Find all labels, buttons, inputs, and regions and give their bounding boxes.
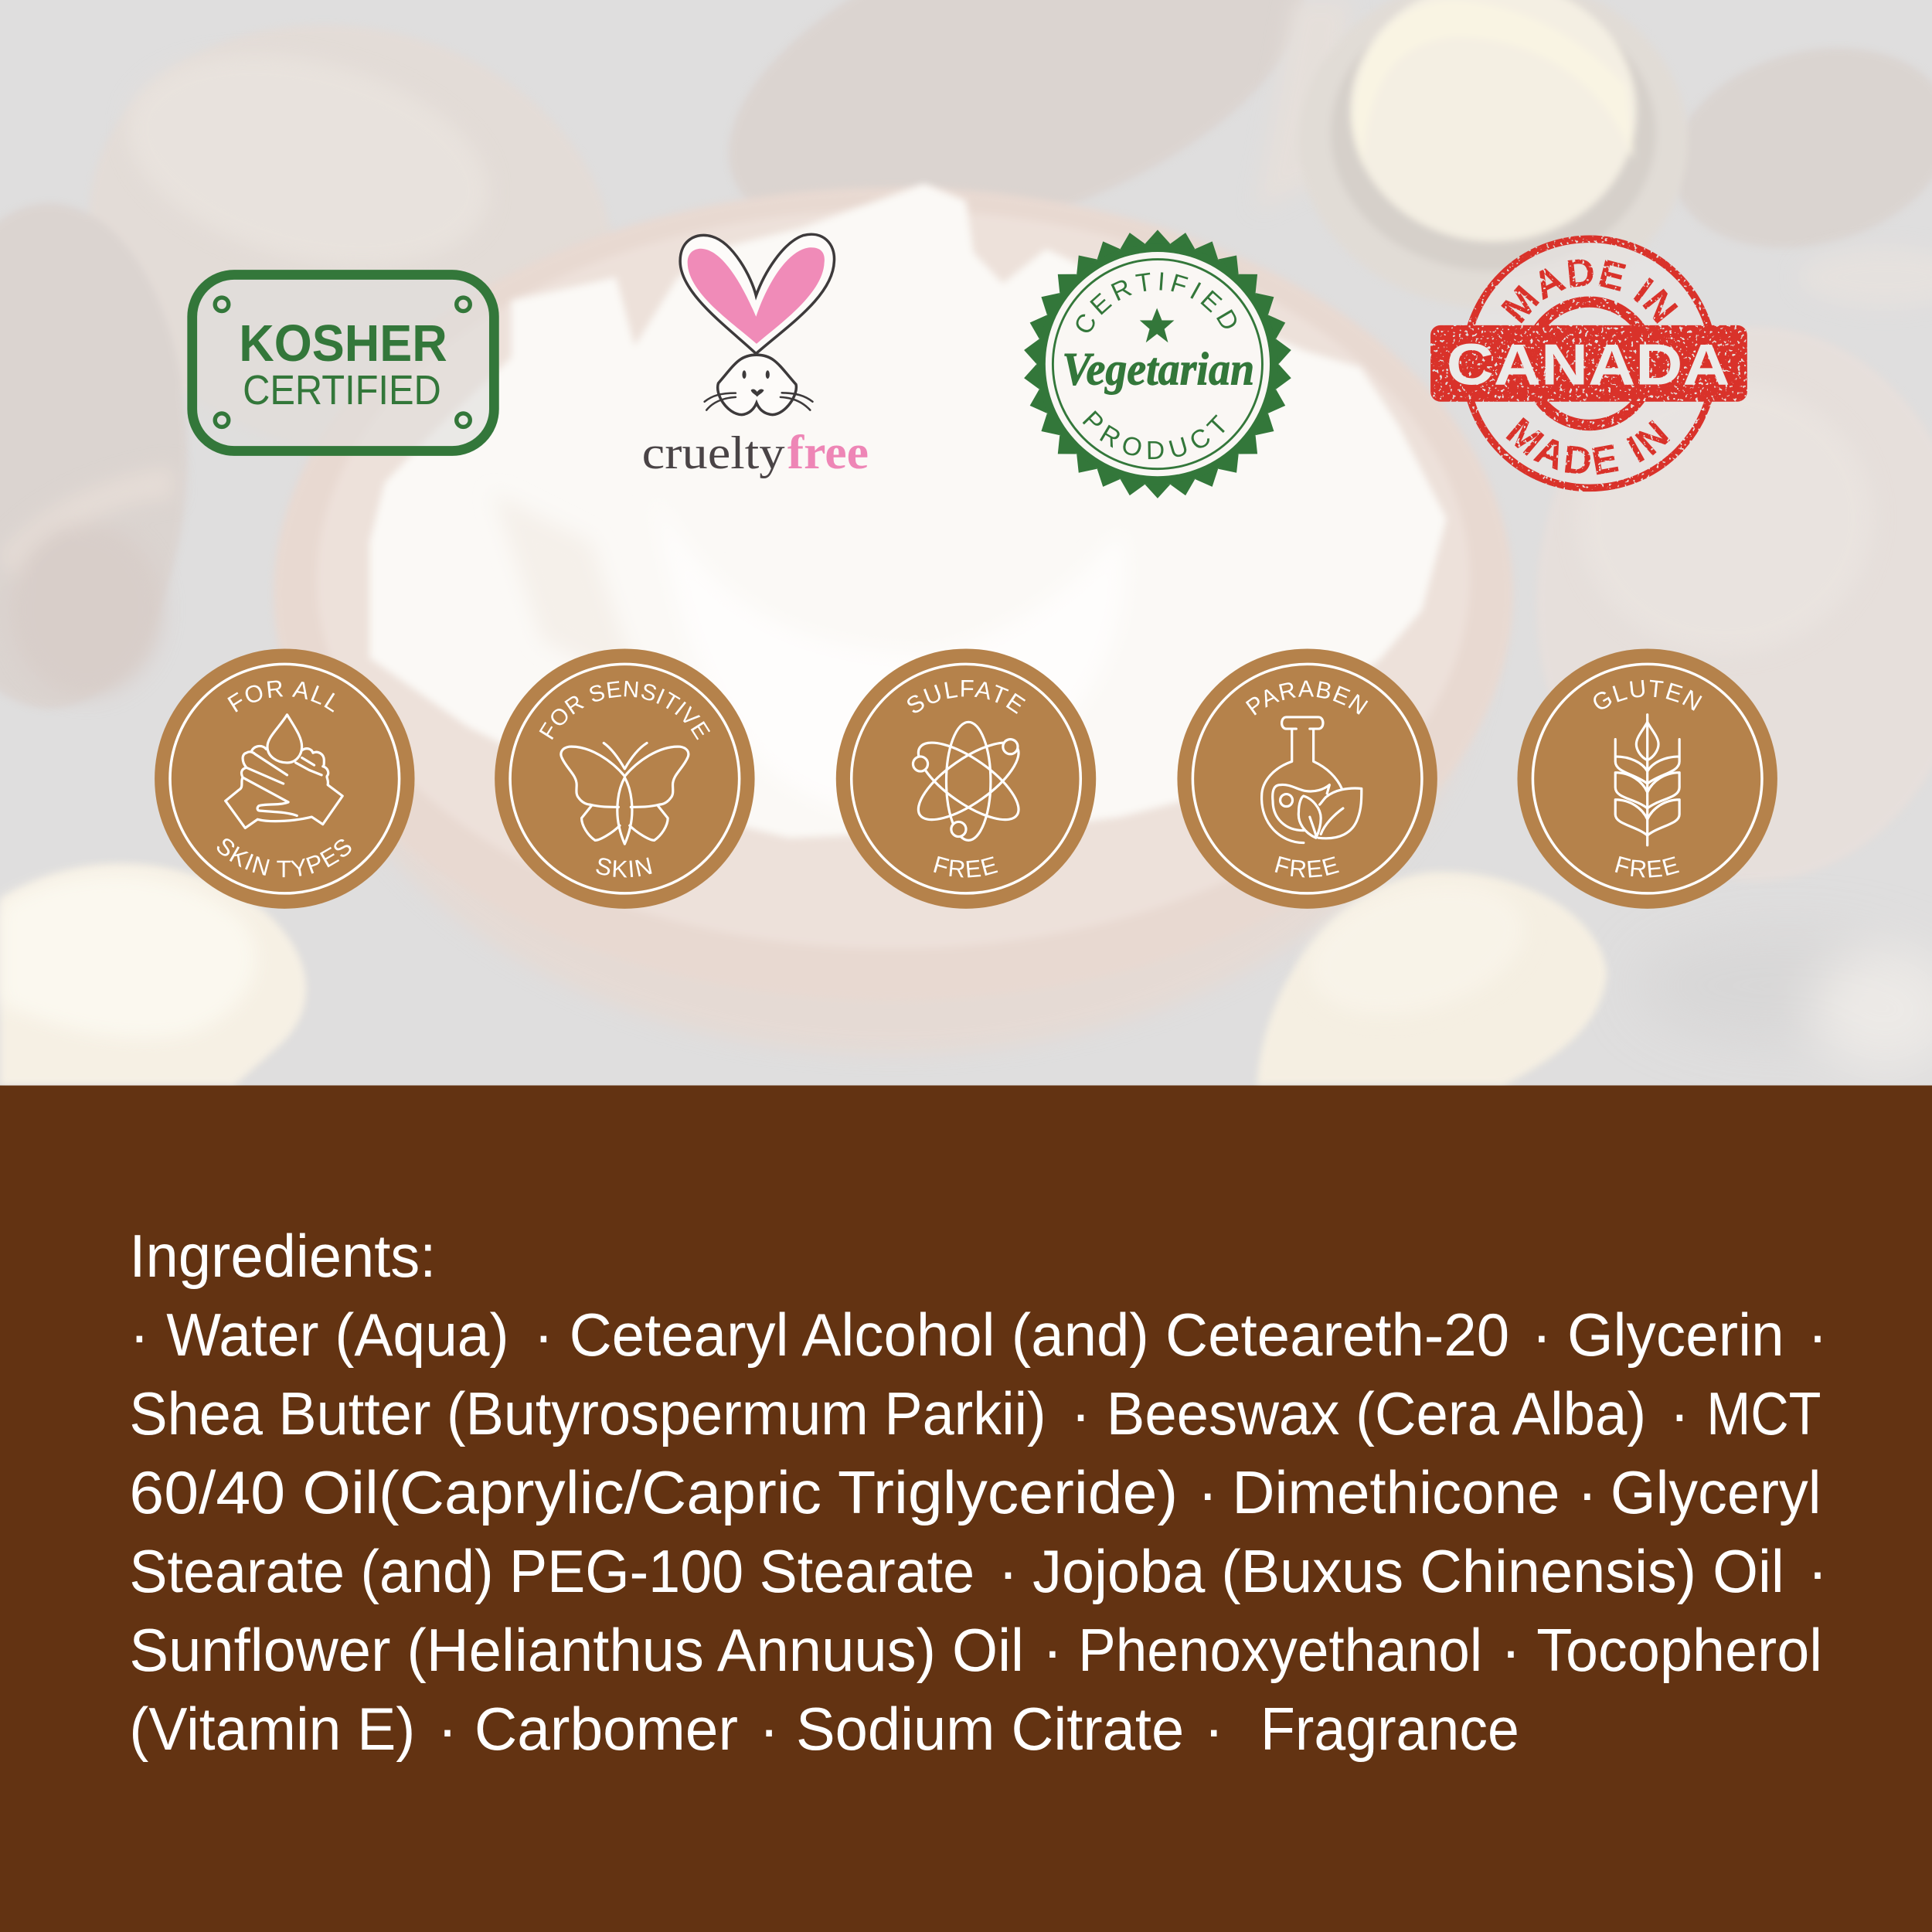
ingredients text: ·	[1808, 1301, 1828, 1369]
bunny ears	[680, 234, 835, 354]
ingredients text: Glyceryl	[1611, 1458, 1821, 1526]
badge: made in canada	[1430, 235, 1747, 492]
ingredients text: ·	[1071, 1379, 1091, 1447]
vegetarian arc text	[1076, 272, 1236, 459]
icon: wheat	[1615, 715, 1679, 845]
ingredients text: Phenoxyethanol	[1078, 1616, 1482, 1684]
ingredients text: Shea Butter (Butyrospermum Parkii)	[129, 1379, 1046, 1447]
badge: paraben free	[1177, 648, 1437, 909]
icon: butterfly	[561, 743, 689, 844]
ingredients text: MCT	[1706, 1379, 1821, 1447]
ingredients text: ·	[1204, 1695, 1224, 1763]
label: gluten free	[1587, 675, 1707, 883]
ingredients text: ·	[437, 1695, 457, 1763]
ingredients text: ·	[1808, 1537, 1828, 1605]
ingredients text: ·	[1501, 1616, 1521, 1684]
badge: kosher certified: KOSHER	[239, 315, 447, 372]
bowl	[396, 845, 1327, 1046]
ingredients text: ·	[759, 1695, 779, 1763]
label: gluten free: GLUTEN	[1594, 680, 1702, 711]
label: for all skin types: SKIN TYPES	[216, 838, 351, 878]
ingredients text: Tocopherol	[1536, 1616, 1822, 1684]
vegetarian arc text: PRODUCT	[1082, 410, 1225, 459]
badge: cruelty free bunny	[642, 234, 869, 479]
ingredients text: Carbomer	[474, 1695, 738, 1763]
ingredients text: ·	[533, 1301, 553, 1369]
badge: cruelty free bunny: free	[787, 427, 869, 479]
ingredients text	[129, 1222, 1828, 1763]
ingredients text: Cetearyl Alcohol (and) Ceteareth-20	[570, 1301, 1509, 1369]
vegetarian star	[1140, 308, 1174, 342]
ingredients text: Dimethicone	[1232, 1458, 1560, 1526]
cup of butter	[1328, 0, 1663, 278]
label: gluten free: FREE	[1615, 856, 1679, 878]
badge: for sensitive skin	[495, 648, 755, 909]
badge: for all skin types	[155, 649, 414, 909]
ingredients text: Glycerin	[1567, 1301, 1784, 1369]
ingredients text: Water (Aqua)	[166, 1301, 509, 1369]
label: for sensitive skin: FOR SENSITIVE	[539, 681, 710, 740]
label: sulfate free: SULFATE	[907, 680, 1026, 714]
icon: hands with drop	[226, 715, 342, 828]
ingredients text: Fragrance	[1260, 1695, 1519, 1763]
badge: sulfate free	[836, 648, 1096, 909]
icon: flask with leaves	[1262, 717, 1362, 843]
badge: made in canada: CANADA	[1447, 332, 1730, 396]
ingredients text: Ingredients:	[129, 1222, 436, 1290]
badge: kosher certified	[192, 275, 494, 451]
ingredients text: ·	[1532, 1301, 1552, 1369]
badge: certified vegetarian product: Vegetarian	[1062, 343, 1254, 395]
label: for all skin types	[216, 680, 351, 878]
badge: kosher certified: CERTIFIED	[243, 367, 441, 413]
cruelty free wordmark: cruelty	[642, 427, 785, 479]
ingredients text: Sodium Citrate	[796, 1695, 1184, 1763]
canada arc text	[1501, 260, 1679, 474]
canada arc text: MADE IN	[1505, 417, 1671, 474]
ingredients text: Sunflower (Helianthus Annuus) Oil	[129, 1616, 1024, 1684]
ingredients text: ·	[1577, 1458, 1597, 1526]
label: paraben free: FREE	[1275, 856, 1339, 878]
vegetarian arc text: CERTIFIED	[1076, 272, 1236, 332]
label: paraben free: PARABEN	[1246, 680, 1368, 716]
ingredients text: 60/40 Oil(Caprylic/Capric Triglyceride)	[129, 1458, 1178, 1526]
label: for all skin types: FOR ALL	[227, 680, 335, 713]
ingredients text: (Vitamin E)	[129, 1695, 415, 1763]
ingredients text: ·	[1198, 1458, 1218, 1526]
ingredients text: ·	[998, 1537, 1018, 1605]
bunny face	[705, 355, 812, 415]
label: paraben free	[1242, 676, 1372, 883]
label: sulfate free	[901, 675, 1031, 883]
label: for sensitive skin: SKIN	[596, 858, 652, 878]
ingredients text: ·	[129, 1301, 149, 1369]
badge: certified vegetarian product	[1024, 230, 1291, 498]
ingredients text: Beeswax (Cera Alba)	[1107, 1379, 1646, 1447]
badge: gluten free	[1517, 648, 1777, 909]
ingredients text: ·	[1043, 1616, 1063, 1684]
label: for sensitive skin	[534, 676, 715, 883]
background photo: shea butter bowl and nuts	[0, 0, 1932, 1086]
ingredients text: Stearate (and) PEG-100 Stearate	[129, 1537, 975, 1605]
ingredients text: Jojoba (Buxus Chinensis) Oil	[1032, 1537, 1784, 1605]
canada arc text: MADE IN	[1501, 260, 1679, 324]
cut nuts	[0, 864, 1607, 1086]
label: sulfate free: FREE	[934, 856, 998, 878]
ingredients panel	[0, 1086, 1932, 1932]
ingredients text: ·	[1669, 1379, 1689, 1447]
icon: atom	[907, 722, 1029, 840]
